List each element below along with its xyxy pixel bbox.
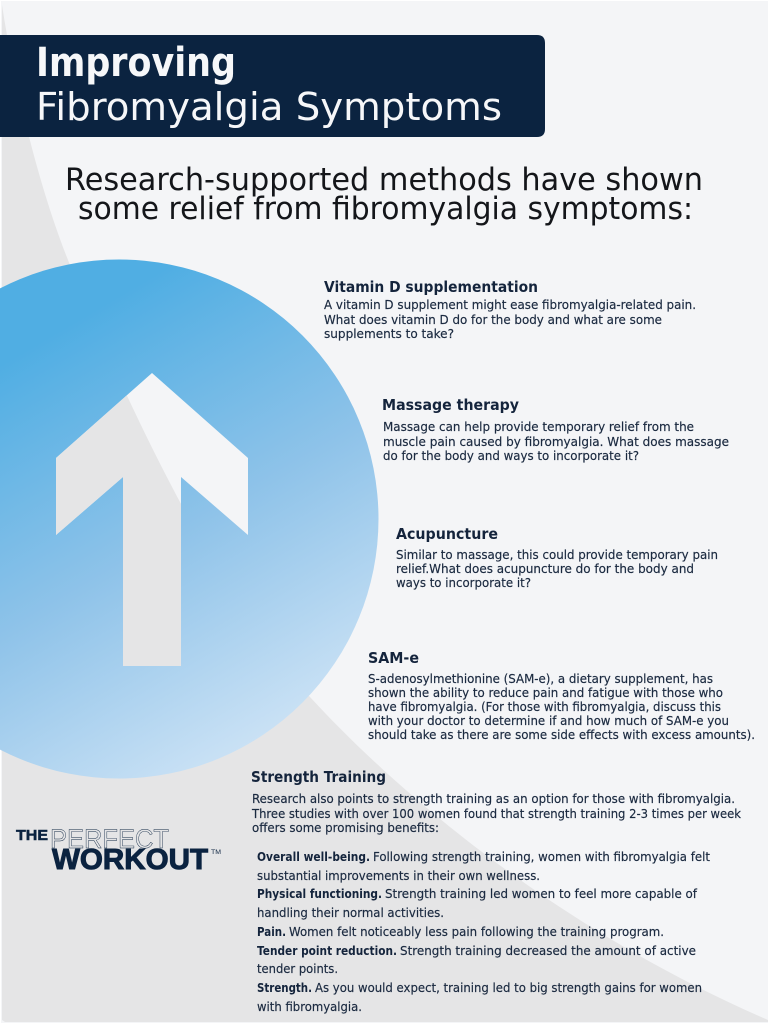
benefits list: Following strength training, women with fibromyalgia felt	[373, 850, 710, 864]
benefits list: Tender point reduction.	[257, 944, 397, 958]
text block: vitamin D	[324, 278, 696, 341]
title line 2: Fibromyalgia Symptoms	[36, 85, 502, 129]
logo: The Perfect Workout: TM	[211, 850, 221, 856]
benefits list: substantial improvements in their own wellness.	[257, 869, 540, 883]
text block: vitamin D: A vitamin D supplement might ease fibromyalgia-related pain.	[324, 298, 696, 312]
benefits list: tender points.	[257, 962, 338, 976]
text block: SAM-e	[368, 649, 755, 742]
logo: The Perfect Workout: THE	[16, 827, 48, 844]
subheading	[65, 162, 703, 227]
logo: The Perfect Workout: WORKOUT	[52, 844, 208, 876]
text block: vitamin D: supplements to take?	[324, 327, 454, 341]
benefits list: Strength training led women to feel more capable of	[385, 887, 698, 901]
blue circle with arrow	[0, 260, 378, 778]
text block: massage therapy: Massage can help provide temporary relief from the	[383, 420, 694, 434]
text block: strength training intro	[251, 768, 742, 835]
text block: SAM-e: shown the ability to reduce pain and fatigue with those who	[368, 686, 723, 700]
benefits list: handling their normal activities.	[257, 906, 444, 920]
logo: The Perfect Workout	[16, 824, 221, 876]
title banner	[0, 35, 545, 137]
text block: SAM-e: have fibromyalgia. (For those with fibromyalgia, discuss this	[368, 700, 721, 714]
logo: The Perfect Workout: PERFECT	[50, 824, 169, 854]
benefits list: Women felt noticeably less pain following the training program.	[289, 925, 664, 939]
text block: vitamin D: What does vitamin D do for the body and what are some	[324, 313, 662, 327]
benefits list: Physical functioning.	[257, 887, 382, 901]
text block: strength training intro: offers some promising benefits:	[252, 821, 439, 835]
text block: strength training intro: Research also points to strength training as an option for those with fibromyalgia.	[252, 792, 735, 806]
benefits list: Overall well-being.	[257, 850, 370, 864]
text block: vitamin D: Vitamin D supplementation	[324, 278, 538, 296]
title line 1: Improving	[36, 40, 236, 86]
text block: strength training intro: Strength Training	[251, 768, 386, 786]
text block: acupuncture: Similar to massage, this could provide temporary pain	[396, 548, 718, 562]
subheading: Research-supported methods have shown	[65, 162, 703, 198]
benefits list: Pain.	[257, 925, 286, 939]
text block: acupuncture	[396, 525, 718, 590]
text block: massage therapy: do for the body and ways to incorporate it?	[383, 449, 639, 463]
benefits list: with fibromyalgia.	[257, 1000, 362, 1014]
text block: SAM-e: SAM-e	[368, 649, 419, 667]
text block: SAM-e: should take as there are some side effects with excess amounts).	[368, 728, 755, 742]
text block: acupuncture: relief.What does acupuncture do for the body and	[396, 562, 694, 576]
text block: strength training intro: Three studies with over 100 women found that strength training 2-3 times per week	[251, 807, 742, 821]
text block: SAM-e: S-adenosylmethionine (SAM-e), a dietary supplement, has	[368, 672, 713, 686]
benefits list: Strength.	[257, 981, 312, 995]
subheading: some relief from fibromyalgia symptoms:	[78, 191, 693, 227]
icon: up arrow	[56, 373, 248, 666]
benefits list	[257, 850, 710, 1014]
benefits list: Strength training decreased the amount of active	[400, 944, 696, 958]
benefits list: As you would expect, training led to big strength gains for women	[315, 981, 702, 995]
text block: acupuncture: ways to incorporate it?	[396, 576, 531, 590]
text block: massage therapy	[382, 396, 729, 463]
text block: massage therapy: muscle pain caused by fibromyalgia. What does massage	[383, 435, 729, 449]
text block: massage therapy: Massage therapy	[382, 396, 519, 414]
text block: SAM-e: with your doctor to determine if and how much of SAM-e you	[368, 714, 729, 728]
text block: acupuncture: Acupuncture	[396, 525, 498, 543]
